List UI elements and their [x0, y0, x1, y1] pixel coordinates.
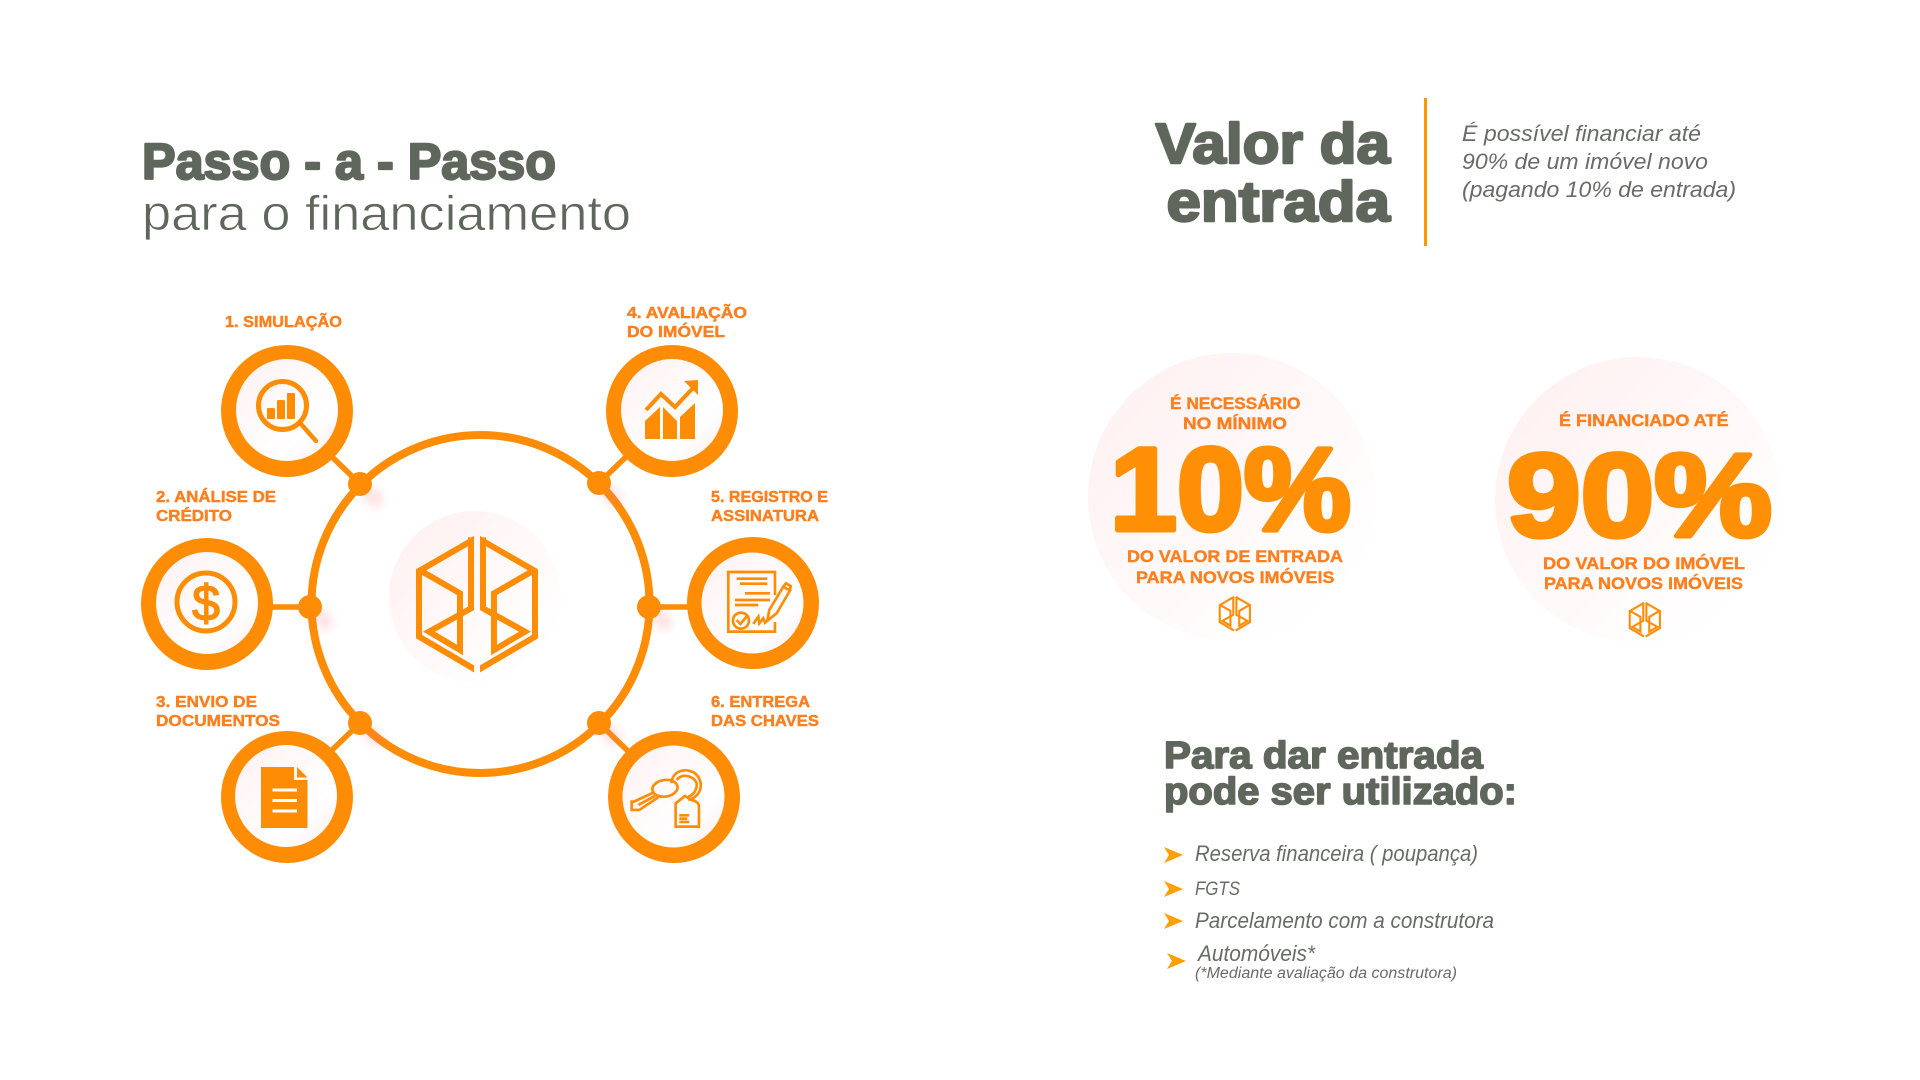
item: automóveis — [1167, 941, 1457, 982]
item: automóveis: (*Mediante avaliação da construtora) — [1195, 965, 1457, 982]
callout: 10% minimum: É NECESSÁRIO — [1170, 394, 1300, 413]
icon: signed contract — [728, 572, 791, 632]
divider — [1424, 98, 1427, 246]
callout: 10% minimum: NO MÍNIMO — [1183, 414, 1287, 433]
text block: financing note: 90% de um imóvel novo — [1462, 149, 1708, 174]
title: passo a passo — [142, 133, 631, 241]
item: reserva financeira: Reserva financeira ( poupança) — [1195, 841, 1478, 866]
step 6: entrega das chaves — [608, 694, 819, 863]
item: parcelamento: Parcelamento com a construtora — [1195, 908, 1494, 933]
icon: small logo — [1220, 597, 1250, 631]
step 5: registro e assinatura: ASSINATURA — [711, 508, 819, 525]
icon: small logo — [1630, 603, 1660, 637]
step 3: envio de documentos: DOCUMENTOS — [156, 713, 280, 730]
node shadows — [316, 489, 669, 743]
step 4: avaliação do imóvel: 4. AVALIAÇÃO — [627, 302, 747, 322]
item: automóveis: Automóveis* — [1196, 941, 1316, 966]
text block: financing note — [1462, 121, 1736, 202]
icon: magnifier with bars — [258, 382, 316, 441]
text block: financing note: É possível financiar até — [1462, 121, 1701, 146]
icon: document — [261, 767, 308, 828]
step 6: entrega das chaves: DAS CHAVES — [711, 713, 819, 730]
step 1: simulação: 1. SIMULAÇÃO — [225, 311, 342, 331]
step 5: registro e assinatura — [687, 489, 828, 669]
ring nodes — [298, 471, 661, 735]
title: passo a passo: para o financiamento — [142, 187, 631, 241]
step 1: simulação — [221, 311, 353, 477]
step 3: envio de documentos: 3. ENVIO DE — [156, 694, 257, 711]
heading: para dar entrada: Para dar entrada — [1164, 735, 1484, 777]
callout: 10% minimum — [1088, 353, 1376, 641]
callout: 90% financed: 90% — [1507, 430, 1772, 562]
step 4: avaliação do imóvel — [606, 302, 747, 477]
step 5: registro e assinatura: 5. REGISTRO E — [711, 489, 828, 506]
heading: para dar entrada — [1164, 735, 1517, 813]
callout: 10% minimum: PARA NOVOS IMÓVEIS — [1136, 568, 1334, 587]
central ring — [312, 435, 650, 773]
item: fgts: FGTS — [1195, 878, 1240, 900]
icon: rising chart — [645, 380, 698, 439]
callout: 90% financed: É FINANCIADO ATÉ — [1559, 411, 1728, 430]
callout: 90% financed — [1495, 357, 1781, 643]
heading: para dar entrada: pode ser utilizado: — [1164, 771, 1517, 813]
step 3: envio de documentos — [156, 694, 353, 863]
step 2: análise de crédito: CRÉDITO — [156, 506, 232, 525]
callout: 90% financed: DO VALOR DO IMÓVEL — [1543, 554, 1745, 573]
callout: 10% minimum: DO VALOR DE ENTRADA — [1127, 547, 1343, 566]
text block: financing note: (pagando 10% de entrada) — [1462, 177, 1736, 202]
icon: keys with tag — [632, 770, 701, 827]
heading: valor da entrada — [1156, 112, 1391, 234]
item: fgts — [1164, 878, 1240, 900]
diagram: six steps around the central ring — [141, 302, 828, 863]
central logo — [389, 511, 538, 672]
heading: valor da entrada: entrada — [1166, 170, 1391, 234]
callout: 90% financed: PARA NOVOS IMÓVEIS — [1544, 574, 1743, 593]
step 4: avaliação do imóvel: DO IMÓVEL — [627, 322, 725, 341]
step 2: análise de crédito: 2. ANÁLISE DE — [156, 487, 276, 506]
list: entry payment options — [1164, 841, 1494, 982]
step 2: análise de crédito — [141, 487, 276, 670]
heading: valor da entrada: Valor da — [1156, 112, 1391, 176]
connector lines — [270, 453, 690, 755]
icon: dollar coin: $ — [192, 575, 220, 631]
icon: dollar coin — [177, 573, 235, 631]
callout: 10% minimum: 10% — [1110, 424, 1351, 556]
title: passo a passo: Passo - a - Passo — [142, 133, 556, 190]
step 6: entrega das chaves: 6. ENTREGA — [711, 694, 810, 711]
